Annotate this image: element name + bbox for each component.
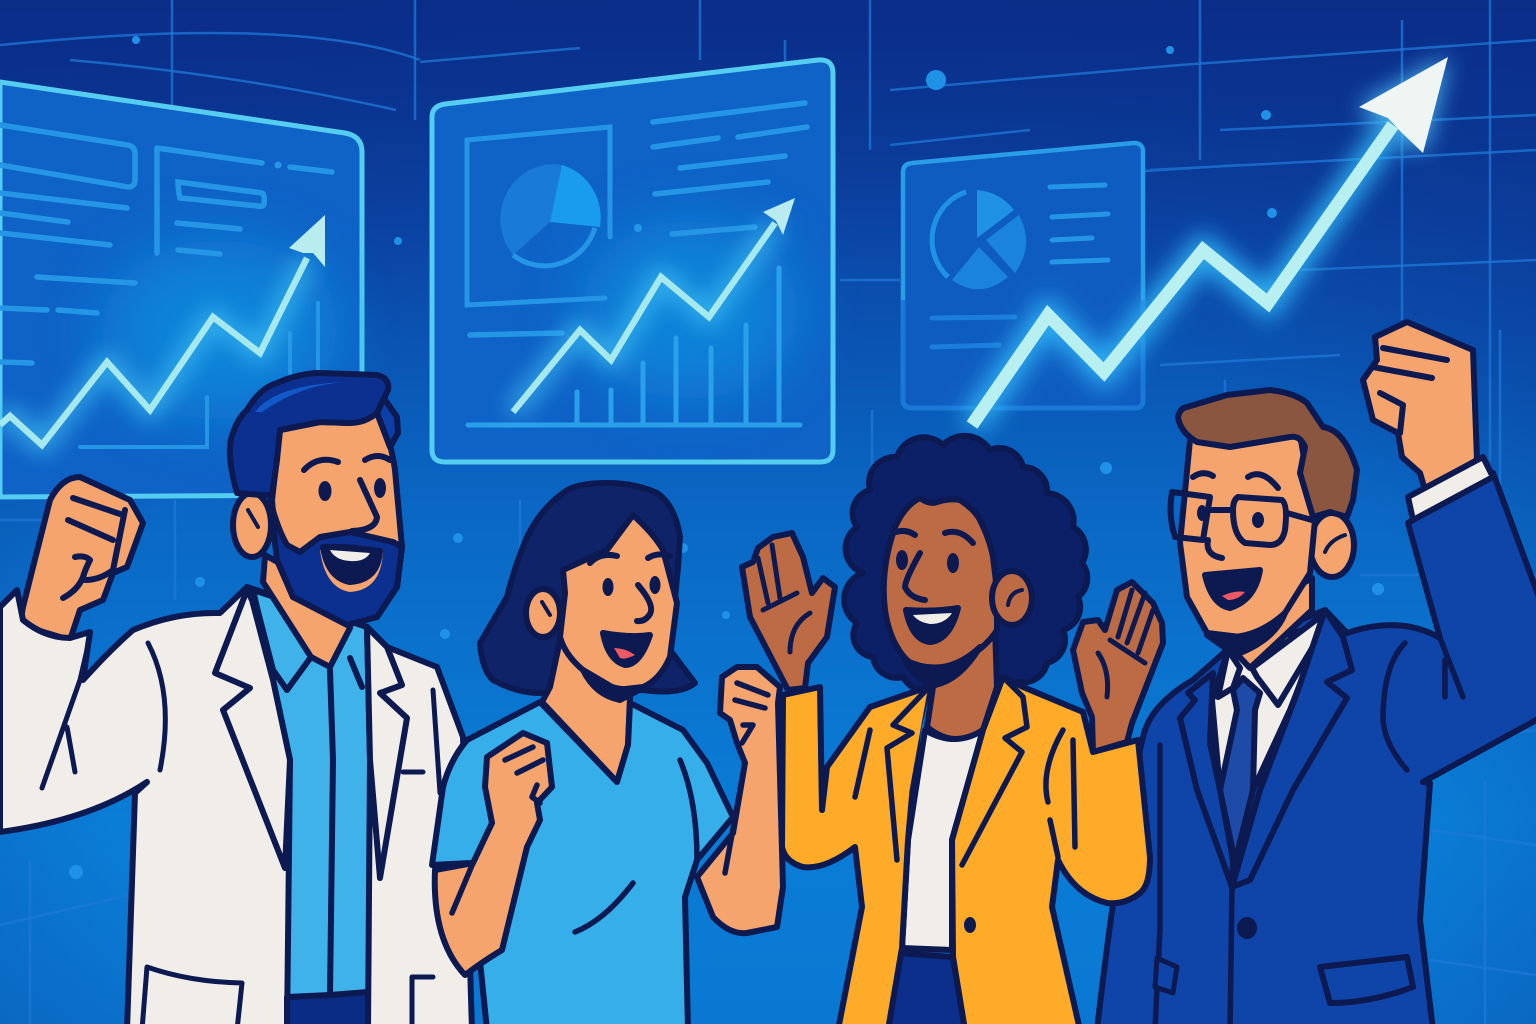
main growth arrow	[972, 57, 1448, 425]
eyes and brows	[304, 456, 390, 531]
curly hair	[844, 436, 1087, 692]
person: woman in yellow blazer	[742, 436, 1163, 1024]
trousers	[888, 953, 965, 1024]
ear	[992, 571, 1032, 625]
scrubs	[432, 702, 733, 1024]
mouth	[323, 547, 380, 582]
collar	[1218, 617, 1323, 705]
pocket	[1320, 957, 1413, 1003]
person: man in blue suit	[1097, 322, 1536, 1024]
lab coat	[0, 587, 472, 1024]
hair	[1178, 390, 1357, 517]
shirt	[1212, 625, 1323, 860]
chart: center pie	[500, 164, 601, 266]
right arm and fist	[697, 667, 783, 933]
panel: left dashboard	[0, 82, 362, 497]
raised right hand	[1073, 582, 1163, 752]
panel: center dashboard	[432, 60, 833, 462]
neck	[542, 640, 630, 782]
person: nurse	[432, 483, 783, 1024]
person: doctor	[0, 373, 472, 1024]
face	[560, 515, 677, 690]
bar chart: center	[468, 268, 800, 425]
panel: right dashboard	[903, 143, 1143, 408]
face	[884, 498, 997, 671]
shirt	[902, 730, 983, 950]
suit	[1097, 473, 1536, 1024]
blazer button	[964, 917, 976, 933]
left arm and fist	[435, 733, 552, 975]
raised fist	[1363, 322, 1477, 490]
coat pocket	[142, 967, 242, 1024]
chin shadow	[583, 670, 643, 700]
chin shadow	[1207, 613, 1285, 655]
shirt	[253, 590, 370, 1024]
chin shadow	[905, 647, 980, 685]
lapels	[1180, 610, 1352, 887]
ear	[233, 493, 271, 557]
beard	[270, 500, 402, 625]
eyes and mouth	[893, 531, 973, 642]
ear	[526, 589, 560, 637]
face	[1180, 435, 1315, 637]
chart arrow: left panel	[0, 215, 325, 445]
face	[272, 413, 402, 623]
blazer	[782, 677, 1150, 1024]
suit button	[1240, 920, 1254, 936]
eyes and mouth	[1193, 473, 1278, 608]
chart: right pie	[932, 190, 1026, 289]
tie	[1220, 678, 1260, 862]
raised left hand	[742, 533, 835, 690]
sleeve vent	[1155, 958, 1177, 993]
eyes and mouth	[590, 554, 670, 665]
glasses	[1171, 492, 1312, 545]
raised fist	[20, 477, 143, 640]
neck	[263, 555, 350, 667]
neck	[1230, 578, 1312, 668]
ear	[1310, 513, 1354, 577]
chart arrow: center	[513, 198, 795, 412]
hair	[230, 373, 398, 495]
neck	[927, 627, 997, 739]
coat lapels	[215, 590, 407, 878]
hair	[480, 483, 695, 693]
cuff	[1408, 457, 1493, 520]
